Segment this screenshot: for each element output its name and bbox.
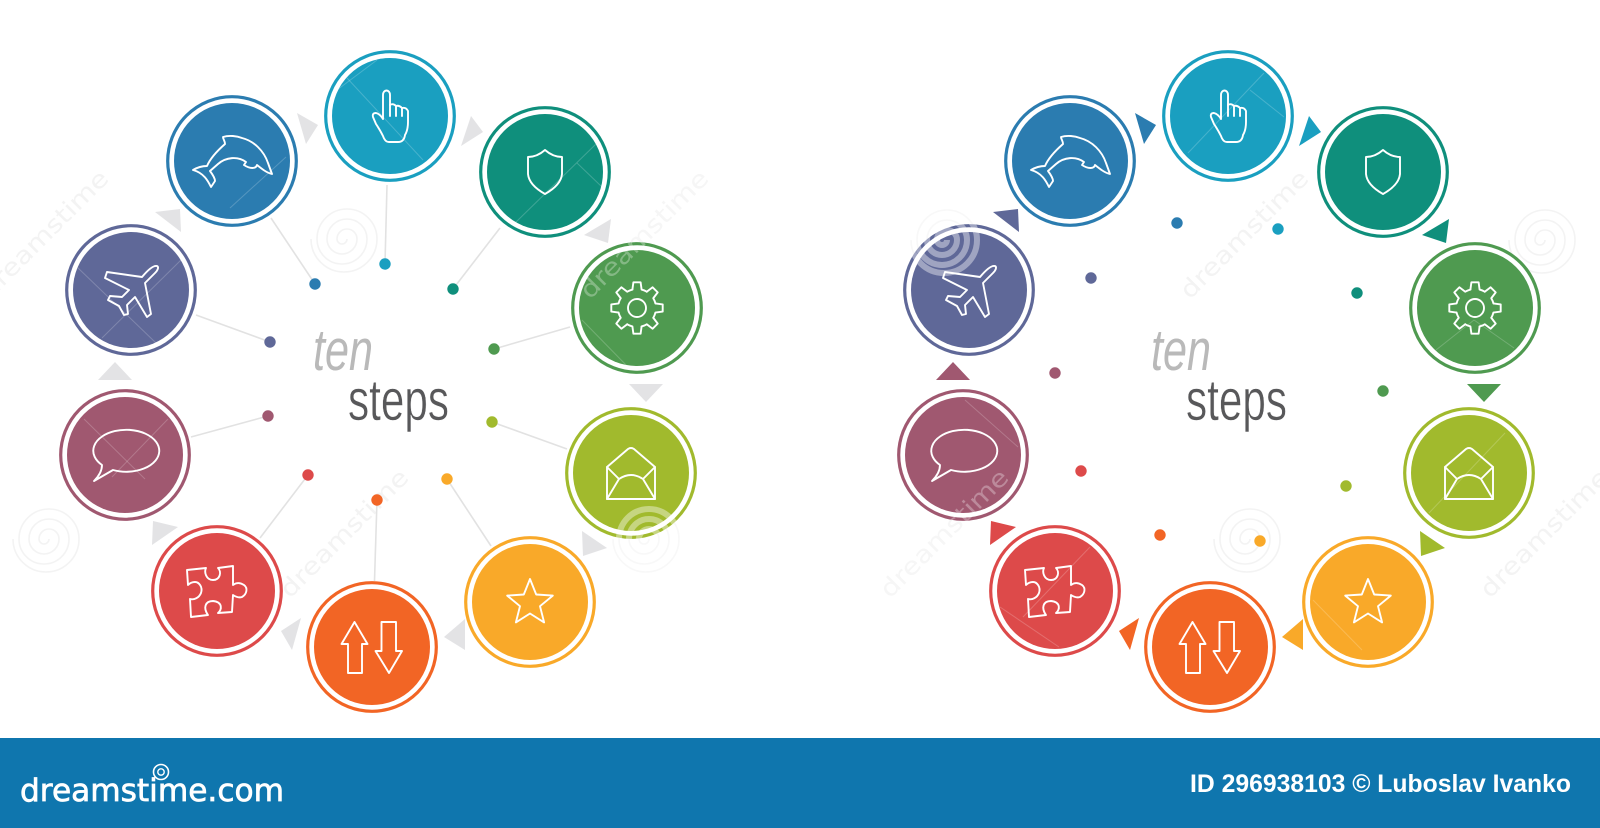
watermark: faint spirals and wordmarks: dreamstime <box>274 463 414 603</box>
footer band <box>0 738 1600 828</box>
step 3: gear icon circle <box>1411 244 1539 372</box>
step 5: star icon circle <box>1304 538 1432 666</box>
heading: ten steps <box>1151 318 1287 433</box>
step 2: shield icon circle <box>481 108 609 236</box>
step 4: envelope icon circle <box>1405 409 1533 537</box>
watermark: faint spirals and wordmarks: dreamstime <box>1474 463 1600 603</box>
step 1: hand icon circle <box>1164 52 1292 180</box>
step 9: airplane icon circle <box>67 226 195 354</box>
step 7: puzzle icon circle <box>153 527 281 655</box>
image credit: ID 296938103 © Luboslav Ivanko <box>1190 770 1571 798</box>
logo: dreamstime.com: dreamstime.com <box>20 773 284 809</box>
watermark: faint spirals and wordmarks: dreamstime <box>574 164 714 304</box>
step 10: dolphin icon circle <box>168 97 296 225</box>
panel: left ten-step cycle with leader lines <box>61 52 701 711</box>
watermark: faint spirals and wordmarks: dreamstime <box>1174 164 1314 304</box>
step 6: up and down arrows icon circle <box>1146 583 1274 711</box>
coloured direction arrows <box>936 113 1501 650</box>
step dots <box>1049 217 1389 547</box>
step 4: envelope icon circle <box>567 409 695 537</box>
panel: right ten-step cycle with coloured arrows <box>899 52 1539 711</box>
step 6: up and down arrows icon circle <box>308 583 436 711</box>
heading: ten steps: steps <box>348 368 449 433</box>
step 3: gear icon circle <box>573 244 701 372</box>
watermark overlay on circles: dreamstime <box>874 463 1014 603</box>
step 7: puzzle icon circle <box>991 527 1119 655</box>
heading: ten steps <box>313 318 449 433</box>
watermark overlay on circles <box>77 60 1514 650</box>
step 8: speech bubble icon circle <box>61 391 189 519</box>
watermark: faint spirals and wordmarks: dreamstime <box>874 463 1014 603</box>
step 10: dolphin icon circle <box>1006 97 1134 225</box>
watermark overlay on circles: dreamstime <box>574 164 714 304</box>
step 1: hand icon circle <box>326 52 454 180</box>
gray direction arrows <box>98 113 663 650</box>
step dots <box>262 258 500 506</box>
heading: ten steps: steps <box>1186 368 1287 433</box>
heading: ten steps: ten <box>313 318 373 383</box>
watermark: faint spirals and wordmarks <box>0 164 1600 603</box>
step 5: star icon circle <box>466 538 594 666</box>
heading: ten steps: ten <box>1151 318 1211 383</box>
step 2: shield icon circle <box>1319 108 1447 236</box>
connector lines from circles to dots <box>191 185 570 581</box>
step 8: speech bubble icon circle <box>899 391 1027 519</box>
step 9: airplane icon circle <box>905 226 1033 354</box>
